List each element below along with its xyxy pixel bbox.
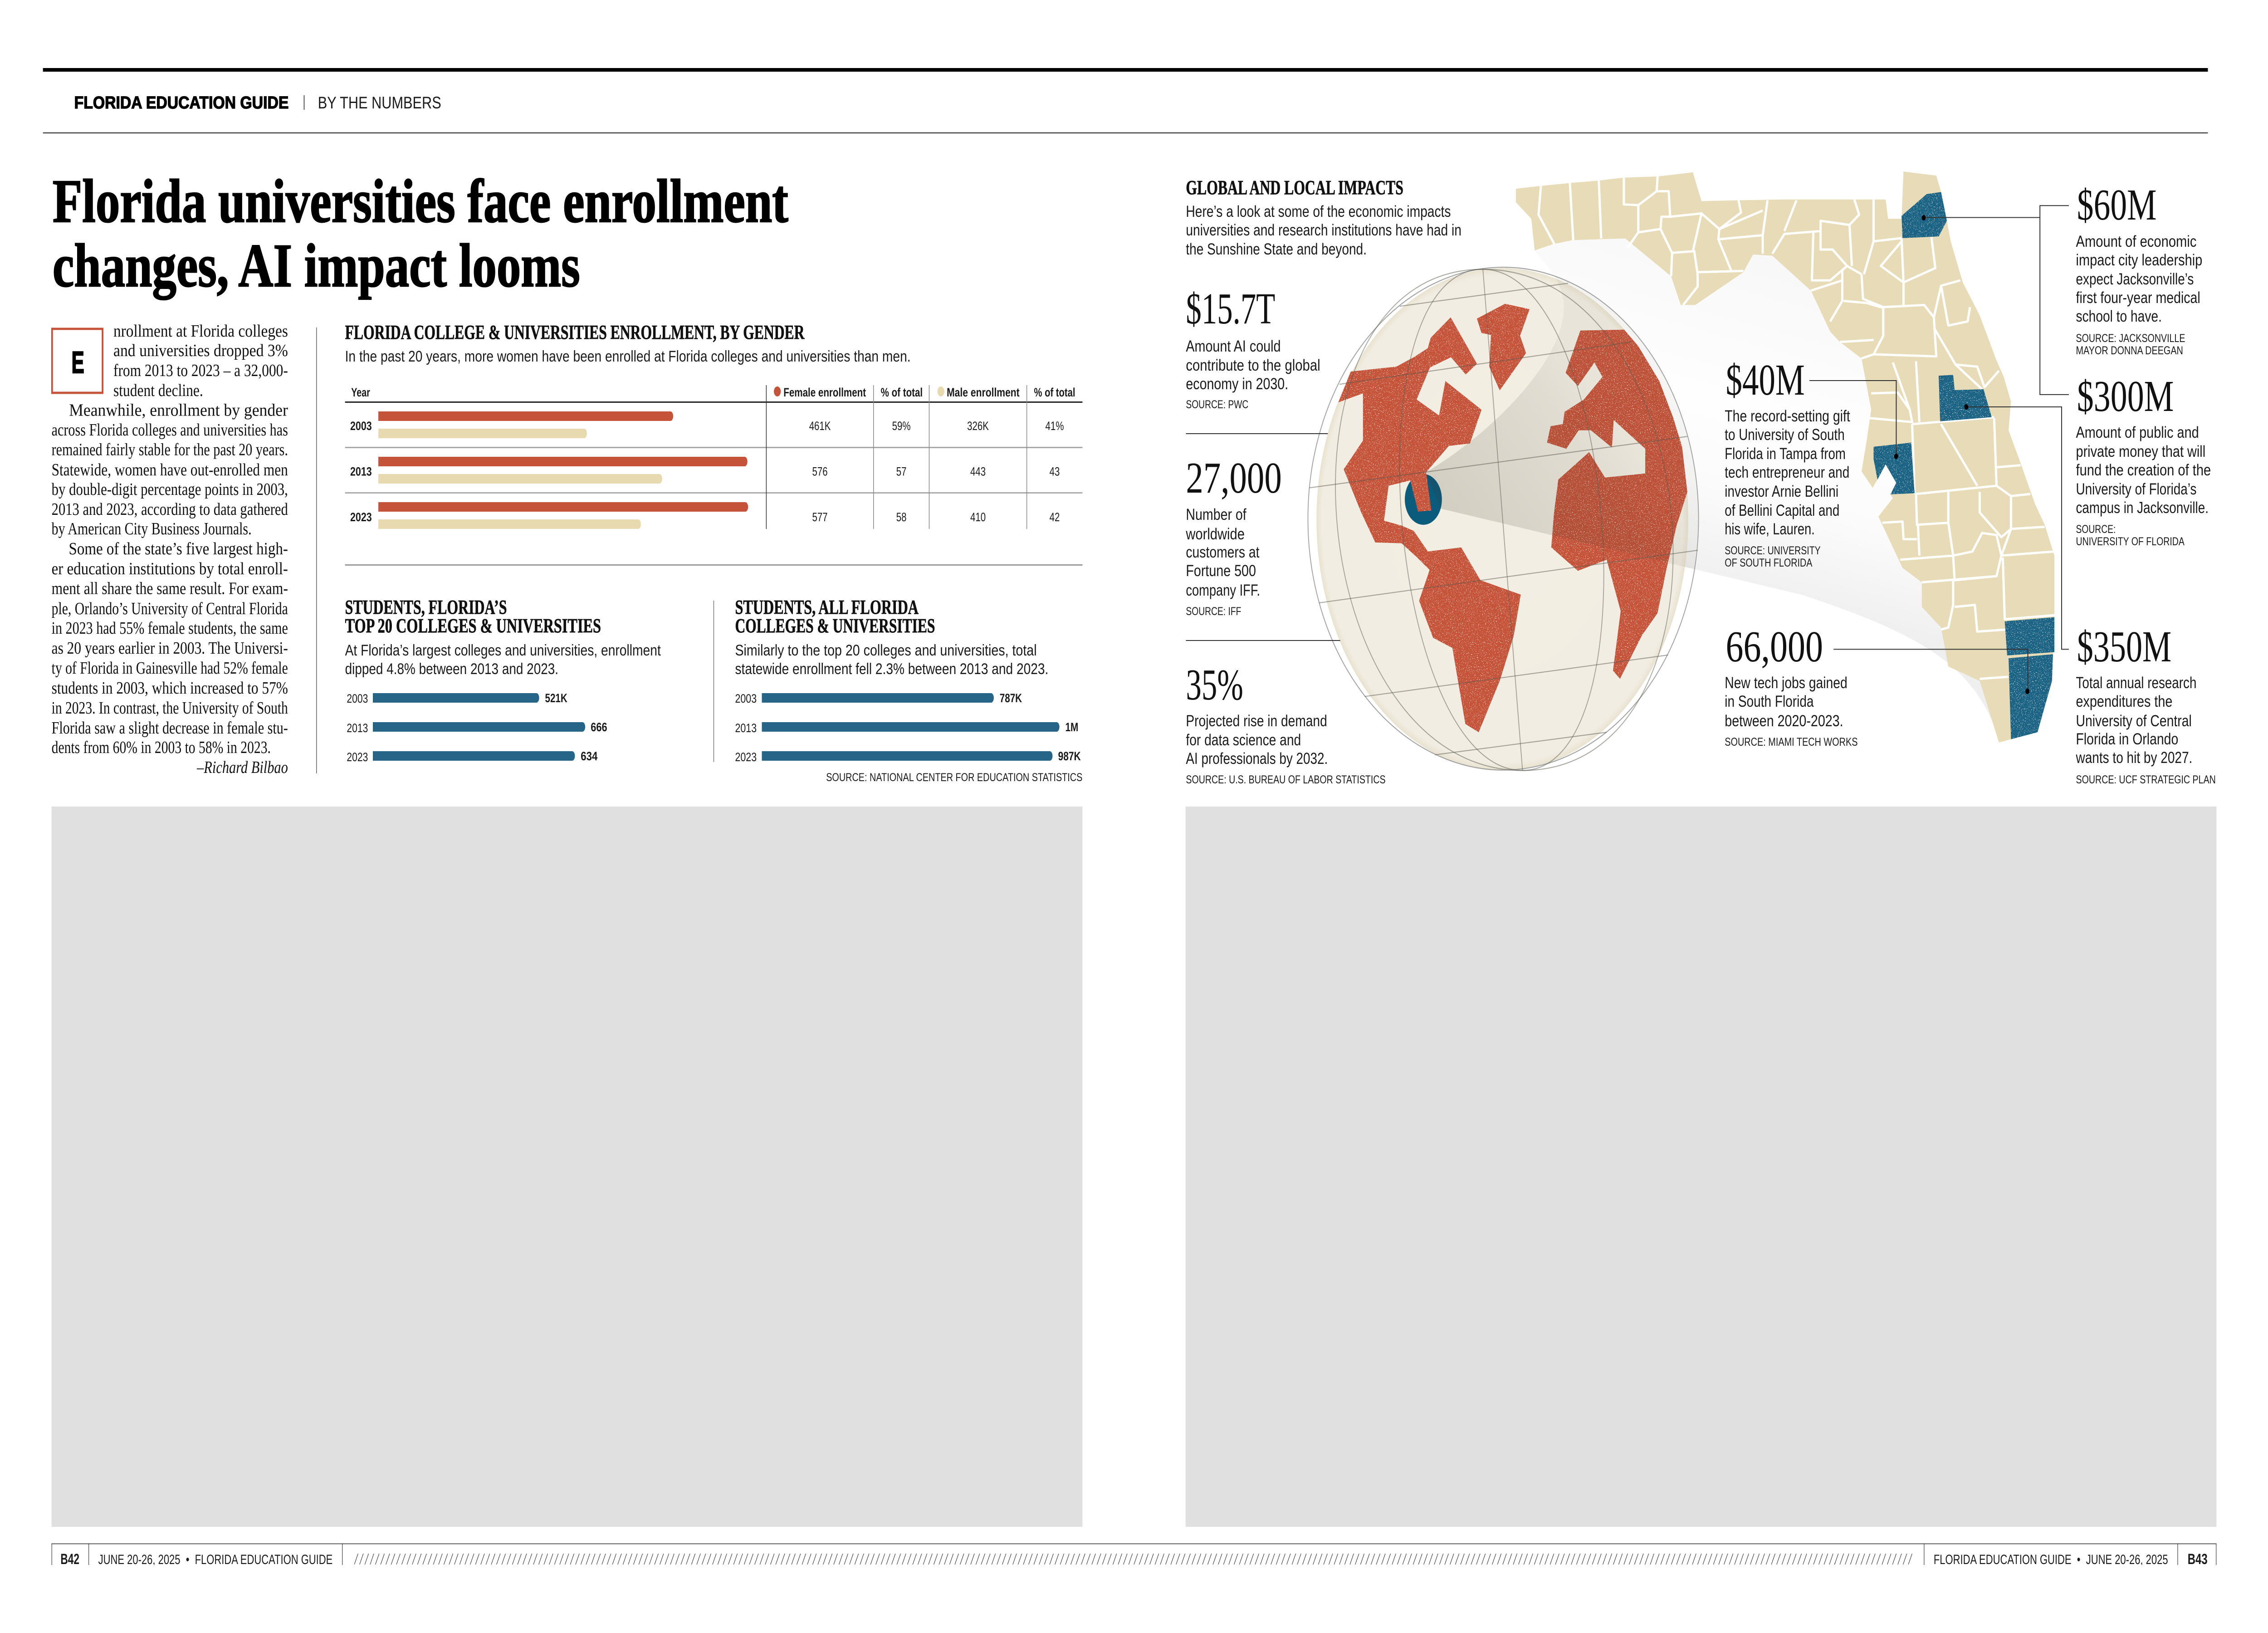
description: top 20: dipped 4.8% between 2013 and 2023. — [345, 661, 558, 678]
article text: by double-digit percentage points in 2003, — [52, 480, 288, 499]
globe wireframe — [1308, 267, 1699, 770]
stat: $300M: SOURCE: — [2076, 523, 2116, 536]
stat: $350M: SOURCE: UCF STRATEGIC PLAN — [2076, 773, 2216, 786]
panel heading: global and local impacts — [1186, 177, 1461, 258]
leader lines — [1809, 205, 2069, 691]
panel: top 20 colleges students — [345, 596, 661, 764]
article text: dents from 60% in 2003 to 58% in 2023. — [52, 738, 271, 757]
table header: Female enrollment — [783, 386, 866, 400]
row: 2023 — [350, 502, 1060, 529]
stat: 66,000: in South Florida — [1725, 692, 1814, 710]
stat: $15.7T: Amount AI could — [1186, 337, 1281, 355]
description: all colleges — [735, 642, 1048, 678]
article text: Florida saw a slight decrease in female stu- — [52, 719, 288, 738]
right folio: B43 — [2188, 1551, 2208, 1568]
page masthead — [43, 68, 2208, 133]
bar chart: all colleges: 2003 — [735, 692, 757, 706]
stat: 66,000: New tech jobs gained — [1725, 674, 1848, 692]
article text: from 2013 to 2023 – a 32,000- — [113, 361, 288, 380]
masthead label: FLORIDA EDUCATION GUIDE — [74, 93, 288, 112]
row: 2013: 576 — [812, 465, 828, 479]
article text: and universities dropped 3% — [113, 341, 288, 360]
bar chart: top 20 — [347, 691, 607, 764]
left folio: B42 — [60, 1551, 79, 1568]
stat: 27,000 — [1185, 453, 1282, 618]
article text: Statewide, women have out-enrolled men — [52, 460, 288, 479]
stat: $60M — [2076, 180, 2202, 357]
bar chart: all colleges: 1M — [1065, 720, 1078, 734]
stat: $60M: impact city leadership — [2076, 251, 2202, 269]
heading: top 20: TOP 20 COLLEGES & UNIVERSITIES — [345, 615, 601, 637]
row: 2013: 443 — [970, 465, 986, 479]
stat: $15.7T: economy in 2030. — [1186, 375, 1288, 393]
row: 2013: 43 — [1050, 465, 1060, 479]
bar chart: all colleges: 2013 — [735, 721, 757, 735]
article text: ment all share the same result. For exam- — [52, 579, 288, 598]
drop cap: E — [72, 345, 84, 380]
stat: $40M: to University of South — [1725, 425, 1845, 444]
stat: $60M: first four-year medical — [2076, 288, 2200, 307]
stat: 35%: for data science and — [1186, 731, 1301, 749]
article text: student decline. — [113, 381, 203, 400]
row: 2003: 461K — [809, 419, 831, 433]
stat: $15.7T: SOURCE: PWC — [1186, 398, 1248, 411]
stat: $15.7T — [1186, 284, 1320, 411]
bar chart: top 20: 2013 — [347, 721, 368, 735]
article text: er education institutions by total enroll- — [52, 559, 288, 578]
stat: 27,000: SOURCE: IFF — [1186, 605, 1241, 618]
row: 2013: 57 — [896, 465, 906, 479]
stat: $40M: investor Arnie Bellini — [1725, 482, 1838, 500]
row: 2023: 2023 — [350, 510, 372, 524]
bar chart: top 20: 2003 — [347, 692, 368, 706]
stat: $40M: SOURCE: UNIVERSITY — [1725, 544, 1821, 557]
stat: $40M: The record-setting gift — [1725, 407, 1850, 425]
stat: $60M: SOURCE: JACKSONVILLE — [2076, 332, 2185, 345]
stat: $15.7T: contribute to the global — [1186, 356, 1320, 374]
description: all colleges: Similarly to the top 20 colleges and universities, total — [735, 642, 1037, 659]
row: 2023: 42 — [1050, 510, 1060, 524]
heading: all colleges: STUDENTS, ALL FLORIDA — [735, 596, 919, 618]
stat: $300M: Amount of public and — [2076, 423, 2199, 441]
ad placeholder right — [1186, 807, 2216, 1527]
stat: $300M: campus in Jacksonville. — [2076, 499, 2209, 517]
hatched band — [354, 1554, 1913, 1565]
intro text: the Sunshine State and beyond. — [1186, 240, 1367, 258]
stat: $60M: Amount of economic — [2076, 232, 2196, 250]
heading: enrollment by gender: FLORIDA COLLEGE & UNIVERSITIES ENROLLMENT, BY GENDER — [345, 322, 805, 343]
stat: 35%: 35% — [1186, 660, 1243, 709]
article text: ple, Orlando’s University of Central Florida — [52, 599, 288, 618]
description: top 20 — [345, 642, 661, 678]
stat: $60M: MAYOR DONNA DEEGAN — [2076, 344, 2183, 357]
article text: by American City Business Journals. — [52, 519, 252, 538]
article text: in 2023. In contrast, the University of South — [52, 699, 288, 718]
row: 2003: 326K — [967, 419, 989, 433]
right folio: FLORIDA EDUCATION GUIDE • JUNE 20-26, 2025 — [1934, 1552, 2168, 1567]
globe disc — [1316, 268, 1688, 771]
heading: all colleges — [735, 596, 935, 637]
stat: 35%: SOURCE: U.S. BUREAU OF LABOR STATISTICS — [1186, 773, 1386, 786]
article text: –Richard Bilbao — [196, 758, 288, 777]
headline — [53, 167, 788, 300]
stat: $60M: $60M — [2077, 180, 2157, 229]
panel: all colleges students — [735, 596, 1082, 784]
stat: $40M: his wife, Lauren. — [1725, 520, 1815, 538]
bar chart: all colleges: 787K — [1000, 691, 1022, 705]
table header: Year — [351, 386, 370, 400]
stat: $350M: expenditures the — [2076, 692, 2172, 710]
stat: 35%: AI professionals by 2032. — [1186, 749, 1328, 768]
article text: remained fairly stable for the past 20 years. — [52, 440, 288, 460]
row: 2003: 59% — [892, 419, 911, 433]
stat: $40M — [1725, 355, 1850, 569]
stat: 66,000: 66,000 — [1726, 622, 1823, 671]
stat: $40M: OF SOUTH FLORIDA — [1725, 556, 1813, 569]
table header — [351, 386, 1075, 400]
ad placeholder left — [52, 807, 1082, 1527]
county lines — [1539, 176, 2054, 679]
globe illustration — [1307, 267, 1699, 771]
stat: $40M: tech entrepreneur and — [1725, 463, 1849, 481]
article text: students in 2003, which increased to 57% — [52, 679, 288, 698]
stat: $350M: University of Central — [2076, 712, 2192, 730]
source: education statistics: SOURCE: NATIONAL CENTER FOR EDUCATION STATISTICS — [826, 771, 1082, 784]
drop cap — [52, 329, 103, 393]
stat: 27,000: Number of — [1186, 505, 1246, 523]
article text: nrollment at Florida colleges — [113, 322, 288, 341]
article text: ty of Florida in Gainesville had 52% female — [52, 659, 288, 678]
stat: $350M: wants to hit by 2027. — [2076, 748, 2192, 767]
stat: $300M — [2076, 372, 2211, 548]
highlighted counties — [1873, 192, 2054, 739]
row: 2023: 410 — [970, 510, 986, 524]
stat: $350M: Florida in Orlando — [2076, 730, 2178, 748]
row: 2013 — [350, 457, 1060, 484]
heading: all colleges: COLLEGES & UNIVERSITIES — [735, 615, 935, 637]
intro text — [1186, 202, 1461, 258]
stat: $60M: expect Jacksonville’s — [2076, 270, 2194, 288]
bar chart: all colleges: 987K — [1058, 749, 1081, 763]
stat: $60M: school to have. — [2076, 307, 2162, 325]
row: 2003: 41% — [1046, 419, 1064, 433]
stat: 27,000: worldwide — [1185, 525, 1245, 543]
light beam outside the globe — [1426, 204, 1997, 732]
location dots — [1894, 215, 2029, 694]
headline: Florida universities face enrollment — [53, 167, 788, 235]
stat: 66,000: SOURCE: MIAMI TECH WORKS — [1725, 735, 1857, 748]
stat: $300M: $300M — [2077, 372, 2174, 420]
article text: as 20 years earlier in 2003. The Universi- — [52, 639, 288, 658]
bar chart: top 20: 521K — [545, 691, 567, 705]
article text: Some of the state’s five largest high- — [69, 539, 288, 558]
Florida county map — [1516, 171, 2069, 743]
description: enrollment by gender: In the past 20 years, more women have been enrolled at Florida colleges and universities than men. — [345, 348, 911, 365]
headline: changes, AI impact looms — [53, 231, 580, 300]
heading: top 20 — [345, 596, 601, 637]
masthead section: BY THE NUMBERS — [318, 93, 441, 112]
bar chart: all colleges: 2023 — [735, 750, 757, 764]
bar chart: top 20: 666 — [591, 720, 607, 734]
stat: $40M: Florida in Tampa from — [1725, 445, 1846, 463]
panel heading: global and local impacts: GLOBAL AND LOCAL IMPACTS — [1186, 177, 1403, 199]
article text: in 2023 had 55% female students, the same — [52, 619, 288, 638]
heading: top 20: STUDENTS, FLORIDA’S — [345, 596, 507, 618]
stat: $300M: University of Florida’s — [2076, 480, 2196, 498]
left folio: JUNE 20-26, 2025 • FLORIDA EDUCATION GUIDE — [98, 1552, 332, 1567]
article text: Meanwhile, enrollment by gender — [69, 401, 288, 420]
bar chart: all colleges — [735, 691, 1081, 764]
intro text: Here’s a look at some of the economic impacts — [1186, 202, 1451, 220]
stat: 35% — [1186, 660, 1386, 786]
marker: Florida on globe — [1405, 474, 1442, 525]
bar chart: top 20: 2023 — [347, 750, 368, 764]
table header: Male enrollment — [947, 386, 1020, 400]
description: top 20: At Florida’s largest colleges and universities, enrollment — [345, 642, 661, 659]
description: all colleges: statewide enrollment fell 2.3% between 2013 and 2023. — [735, 661, 1048, 678]
table rules — [345, 385, 1082, 529]
state outline — [1516, 171, 2054, 743]
row: 2023: 58 — [896, 510, 906, 524]
stat: $40M: $40M — [1726, 355, 1805, 404]
stat: $300M: private money that will — [2076, 442, 2205, 460]
table header: % of total — [881, 386, 923, 400]
stat: 66,000: between 2020-2023. — [1725, 712, 1843, 730]
stat: 27,000: company IFF. — [1186, 581, 1260, 599]
article text: across Florida colleges and universities has — [52, 420, 288, 440]
article text — [52, 322, 288, 777]
stat: $350M — [2076, 622, 2216, 786]
stat: 27,000: 27,000 — [1186, 453, 1282, 502]
page footer — [52, 1543, 2216, 1568]
panel: enrollment by gender — [345, 322, 1082, 529]
stat: 27,000: Fortune 500 — [1186, 562, 1256, 580]
stat: 35%: Projected rise in demand — [1186, 712, 1327, 730]
article text: 2013 and 2023, according to data gathered — [52, 500, 288, 519]
stat: $350M: Total annual research — [2076, 674, 2196, 692]
row: 2003: 2003 — [350, 419, 372, 433]
stat: $300M: fund the creation of the — [2076, 461, 2211, 479]
row: 2023: 577 — [812, 510, 828, 524]
row: 2013: 2013 — [350, 465, 372, 479]
bar chart: top 20: 634 — [581, 749, 598, 763]
row: 2003 — [350, 411, 1064, 438]
continents — [1339, 304, 1687, 732]
stat: $15.7T: $15.7T — [1186, 284, 1275, 333]
light beam inside the globe — [1426, 277, 1698, 569]
intro text: universities and research institutions have had in — [1186, 221, 1461, 239]
stat: $350M: $350M — [2077, 622, 2171, 671]
stat: $300M: UNIVERSITY OF FLORIDA — [2076, 535, 2185, 548]
stat: 27,000: customers at — [1186, 543, 1260, 561]
table header: % of total — [1034, 386, 1075, 400]
stat: 66,000 — [1725, 622, 1857, 748]
stat: $40M: of Bellini Capital and — [1725, 501, 1839, 519]
